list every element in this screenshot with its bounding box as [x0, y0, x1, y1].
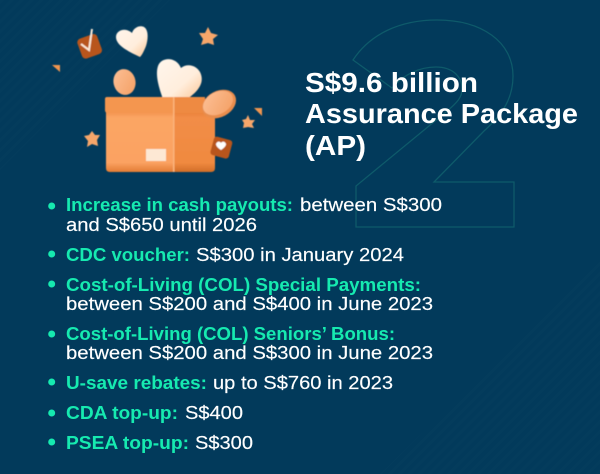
icon: star right: [242, 115, 255, 128]
icon: top star: [199, 27, 218, 45]
item: cash payouts: and S$650 until 2026: [66, 215, 257, 235]
box body left: [106, 110, 174, 172]
bullet list: [48, 195, 442, 453]
icon: check badge: [76, 29, 103, 60]
item: CDC voucher: S$300 in January 2024: [196, 245, 404, 265]
item: cash payouts: between S$300: [300, 195, 442, 215]
icon: small triangle right: [254, 108, 262, 116]
item: COL special payments: Cost-of-Living (COL) Special Payments:: [66, 275, 421, 295]
title: [305, 67, 578, 161]
item: cash payouts: Increase in cash payouts:: [66, 195, 293, 215]
box body right: [174, 110, 215, 172]
icon: heart badge: [210, 136, 233, 159]
item: PSEA top-up: [48, 433, 253, 453]
item: COL seniors bonus: between S$200 and S$300 in June 2023: [66, 343, 433, 363]
item: COL special payments: [48, 275, 433, 314]
item: CDA top-up: S$400: [185, 403, 243, 423]
icon: large heart: [157, 59, 202, 99]
item: U-save rebates: up to S$760 in 2023: [213, 373, 393, 393]
item: PSEA top-up: S$300: [195, 433, 253, 453]
item: COL seniors bonus: [48, 324, 433, 363]
icon: coin right: [197, 84, 241, 124]
icon: small triangle left: [52, 65, 60, 72]
item: PSEA top-up: PSEA top-up:: [66, 433, 189, 453]
box label: [146, 149, 166, 161]
item: U-save rebates: [48, 373, 393, 393]
item: cash payouts: [48, 195, 442, 235]
illustration: gift box with hearts and coins: [52, 26, 262, 172]
item: CDA top-up: CDA top-up:: [66, 403, 178, 423]
item: CDC voucher: [48, 245, 404, 265]
icon: star left: [84, 131, 100, 147]
item: COL special payments: between S$200 and S$400 in June 2023: [66, 294, 433, 314]
icon: coin left: [111, 67, 138, 97]
large outlined numeral 2: [353, 20, 514, 227]
box lid: [105, 97, 205, 172]
title: (AP): [305, 130, 366, 161]
item: CDC voucher: CDC voucher:: [66, 245, 190, 265]
item: COL seniors bonus: Cost-of-Living (COL) Seniors’ Bonus:: [66, 324, 395, 344]
item: U-save rebates: U-save rebates:: [66, 373, 207, 393]
title: Assurance Package: [305, 98, 578, 129]
icon: top heart: [116, 26, 148, 57]
title: S$9.6 billion: [305, 67, 478, 98]
item: CDA top-up: [48, 403, 243, 423]
